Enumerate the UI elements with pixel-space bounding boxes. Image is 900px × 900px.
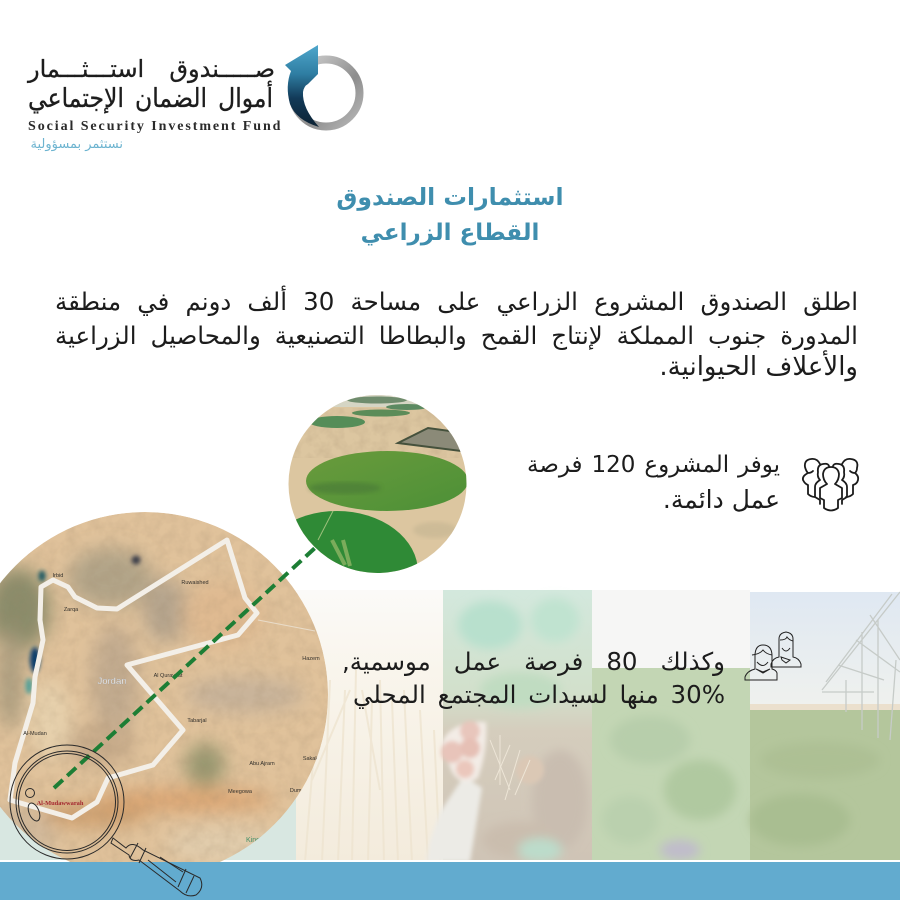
map of Jordan circle: Al Qurayyat [154,673,183,679]
seasonal jobs text: وكذلك 80 فرصة عمل موسمية, [342,647,725,676]
first jobs text: عمل دائمة. [663,485,780,514]
intro paragraph: المدورة جنوب المملكة لإنتاج القمح والبطاطا التصنيعية والمحاصيل الزراعية [55,321,858,350]
intro paragraph [55,286,858,382]
map of Jordan circle: Ruwaished [181,580,209,586]
title line 1: استثمارات الصندوق [336,183,564,211]
logo Arabic name line 2: أموال الضمان الإجتماعي [28,82,273,114]
logo [26,45,364,152]
map of Jordan circle: Abu Ajram [249,761,275,767]
logo English name: Social Security Investment Fund [28,119,282,134]
map label Al-Mudawwarah: Al-Mudawwarah [37,800,84,807]
map of Jordan circle: Hazem [302,656,320,662]
magnifying glass [10,745,202,896]
map of Jordan circle: King Sal [246,837,273,844]
intro paragraph: اطلق الصندوق المشروع الزراعي على مساحة 30 ألف دونم في منطقة [55,287,858,316]
map of Jordan circle: Zarqa [64,607,79,613]
logo Arabic name line 1: صـــــندوق استـــثـــمار [28,55,275,83]
logo slogan: نستثمر بمسؤولية [31,137,123,152]
intro paragraph: والأعلاف الحيوانية. [659,352,858,382]
first jobs text [527,452,780,514]
bottom blue bar [0,862,900,900]
aerial photo of pivot-irrigated fields [288,395,466,573]
seasonal jobs text [342,647,725,709]
map of Jordan circle: Dumat [290,788,307,794]
dashed connector line [54,547,316,788]
seasonal jobs text: 30% منها لسيدات المجتمع المحلي [353,680,725,709]
map label Jordan: Jordan [97,676,127,687]
logo emblem: ring and arrow [285,45,364,130]
map of Jordan circle: Meegowa [228,789,253,795]
title line 2: القطاع الزراعي [361,220,539,246]
map of Jordan circle: Al-Mudan [23,731,47,737]
map of Jordan circle: Irbid [53,573,63,579]
map of Jordan circle: Tabarjal [187,718,207,724]
first jobs text: يوفر المشروع 120 فرصة [527,452,780,478]
map of Jordan circle [0,512,328,896]
title [336,183,564,246]
map of Jordan circle: Sakaka [303,756,322,762]
